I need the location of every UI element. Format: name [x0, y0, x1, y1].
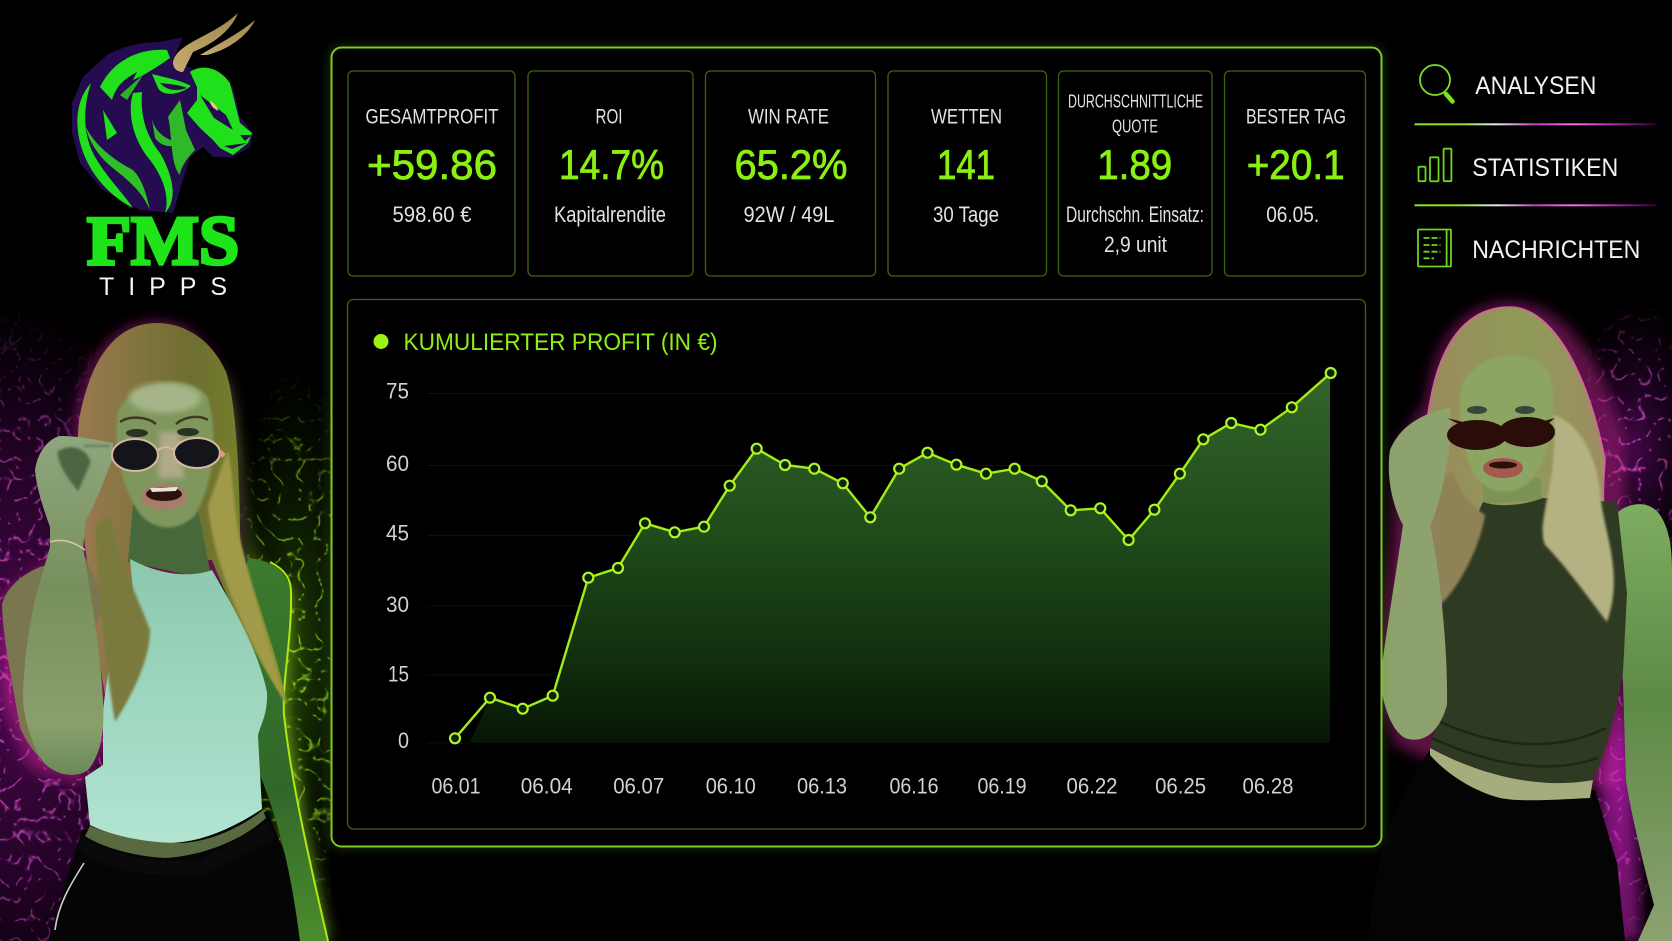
right woman top	[1430, 498, 1627, 783]
divider line 2	[1414, 204, 1656, 206]
left woman bracelet	[50, 540, 85, 550]
right woman mouth	[1483, 458, 1523, 478]
y axis labels	[386, 378, 409, 753]
illustration: right woman	[1368, 302, 1672, 941]
y axis labels: 75	[386, 378, 409, 404]
x axis labels	[432, 774, 1294, 798]
bull mane top shade	[120, 75, 143, 100]
profit line	[455, 373, 1331, 738]
x axis labels: 06.01	[432, 774, 480, 798]
stat card: Durchschnittliche Quote: Durchschn. Einsatz:	[1066, 202, 1204, 227]
right woman sunglasses	[1447, 417, 1555, 450]
y axis labels: 30	[386, 592, 409, 617]
area fill under line	[470, 373, 1330, 743]
left woman neck	[128, 505, 212, 580]
x axis labels: 06.19	[978, 774, 1026, 798]
y axis labels: 60	[386, 451, 409, 476]
stat card: Durchschnittliche Quote: DURCHSCHNITTLICHE	[1068, 92, 1203, 112]
background: right magenta lightning veins	[1584, 308, 1672, 936]
right woman pants	[1368, 750, 1625, 941]
stat card: Gesamtprofit: 598.60 €	[392, 202, 472, 227]
bull ear inner	[160, 83, 187, 90]
navigation: Nachrichten: NACHRICHTEN	[1472, 236, 1640, 264]
stat card: Gesamtprofit: +59.86	[367, 141, 497, 188]
left woman right arm	[240, 558, 328, 941]
stat card: ROI: ROI	[596, 106, 622, 128]
y axis labels: 15	[388, 662, 409, 686]
stat card: ROI: Kapitalrendite	[554, 202, 666, 227]
divider line 1	[1414, 123, 1656, 125]
x axis labels: 06.25	[1155, 774, 1206, 798]
dashboard panel	[332, 48, 1382, 846]
left woman arm rim light	[270, 562, 328, 941]
navigation: Statistiken	[1418, 149, 1618, 182]
x axis labels: 06.04	[521, 774, 573, 798]
right woman rim glow	[1376, 302, 1640, 941]
x axis labels: 06.10	[706, 774, 756, 798]
chart heading: KUMULIERTER PROFIT (IN €)	[404, 329, 718, 356]
x axis labels: 06.07	[613, 774, 664, 798]
bull mane strand 3	[131, 92, 173, 213]
stat card: Win Rate: 65.2%	[734, 141, 848, 188]
bull ear	[152, 74, 191, 94]
illustration: left woman	[0, 322, 330, 941]
stat card: Win Rate: WIN RATE	[748, 106, 829, 128]
bull eye	[210, 101, 218, 111]
bull mane spike	[103, 110, 117, 140]
left woman fingers	[58, 446, 110, 490]
stat card: Gesamtprofit: GESAMTPROFIT	[366, 106, 499, 128]
bull horns	[173, 13, 255, 72]
left woman belt	[78, 822, 276, 876]
stat card: Wetten: 141	[937, 141, 995, 188]
right woman arm	[1380, 408, 1452, 740]
stat card: Durchschnittliche Quote: 2,9 unit	[1104, 232, 1167, 257]
navigation: Statistiken: STATISTIKEN	[1472, 154, 1618, 182]
left woman shoulder	[2, 555, 105, 762]
right woman top folds	[1432, 720, 1606, 766]
left woman pants	[48, 812, 302, 941]
bull mane strand 1	[77, 83, 133, 208]
left woman stripe	[55, 863, 84, 930]
bull nostril and mouth	[224, 135, 252, 149]
stat card: ROI	[528, 71, 693, 276]
bull eye socket	[200, 95, 233, 130]
icon: magnifier	[1420, 65, 1452, 102]
background: left green lightning veins	[240, 378, 331, 900]
left woman top	[85, 559, 267, 843]
icon: bar chart	[1418, 149, 1451, 181]
left woman hair	[78, 323, 287, 728]
left woman mouth	[141, 484, 187, 510]
bull neck fur	[152, 100, 195, 175]
stat card: Wetten: WETTEN	[931, 106, 1002, 128]
bull head	[187, 68, 252, 155]
stat card: Wetten	[888, 71, 1046, 276]
stat card: Bester Tag	[1224, 71, 1366, 276]
FMS wordmark: FMS	[87, 203, 239, 280]
right woman midriff	[1430, 748, 1593, 800]
left woman rim glow	[0, 322, 330, 941]
stat card: Gesamtprofit	[348, 71, 515, 276]
stat card: Bester Tag: 06.05.	[1266, 202, 1319, 227]
left woman face	[116, 382, 214, 528]
stat card: ROI: 14.7%	[559, 141, 664, 188]
right woman face	[1460, 355, 1553, 492]
panel frame	[332, 48, 1382, 846]
stat card: Bester Tag: +20.1	[1247, 141, 1345, 188]
TIPPS wordmark: TIPPS	[99, 273, 227, 301]
y axis labels: 45	[386, 520, 409, 546]
icon: document	[1418, 230, 1451, 266]
stat card: Durchschnittliche Quote: QUOTE	[1112, 116, 1158, 136]
left woman hair right strand	[208, 450, 287, 705]
left woman sunglasses	[112, 438, 224, 471]
right woman eyes	[1467, 406, 1535, 414]
navigation: Nachrichten	[1418, 230, 1640, 266]
x axis labels: 06.13	[797, 774, 847, 798]
left woman midriff	[85, 810, 266, 858]
navigation: Analysen: ANALYSEN	[1475, 72, 1596, 100]
left woman hair front strand	[95, 515, 150, 722]
line markers	[450, 368, 1336, 743]
right woman neck	[1482, 478, 1542, 504]
stat card: Durchschnittliche Quote	[1058, 71, 1212, 276]
stat card: Bester Tag: BESTER TAG	[1246, 106, 1346, 128]
right woman right arm	[1618, 504, 1672, 941]
y axis labels: 0	[398, 728, 409, 753]
bull head and mane silhouette	[72, 37, 253, 213]
right woman hair curls	[1543, 415, 1614, 622]
bull mane strand 2	[86, 127, 150, 210]
x axis labels: 06.22	[1066, 774, 1118, 798]
x axis labels: 06.16	[890, 774, 938, 798]
bull mane top	[100, 50, 170, 100]
left woman forehead highlight	[129, 383, 201, 413]
stat card: Durchschnittliche Quote: 1.89	[1097, 141, 1172, 188]
navigation: Analysen	[1420, 65, 1596, 102]
stat card: Win Rate	[706, 71, 876, 276]
right woman hair left strand	[1431, 470, 1485, 608]
left woman forearm and hand	[23, 436, 113, 775]
left woman eyes and brows	[120, 417, 208, 437]
background: left magenta lightning veins	[0, 307, 105, 941]
chart panel: cumulative profit	[348, 300, 1366, 829]
panel outer glow	[332, 48, 1382, 846]
x axis labels: 06.28	[1242, 774, 1294, 798]
logo: FMS Tipps bull	[72, 13, 255, 301]
right woman hair	[1425, 307, 1622, 622]
stat card: Wetten: 30 Tage	[933, 202, 999, 227]
left woman cheek and nose highlight	[158, 432, 184, 478]
stat card: Win Rate: 92W / 49L	[744, 202, 834, 227]
